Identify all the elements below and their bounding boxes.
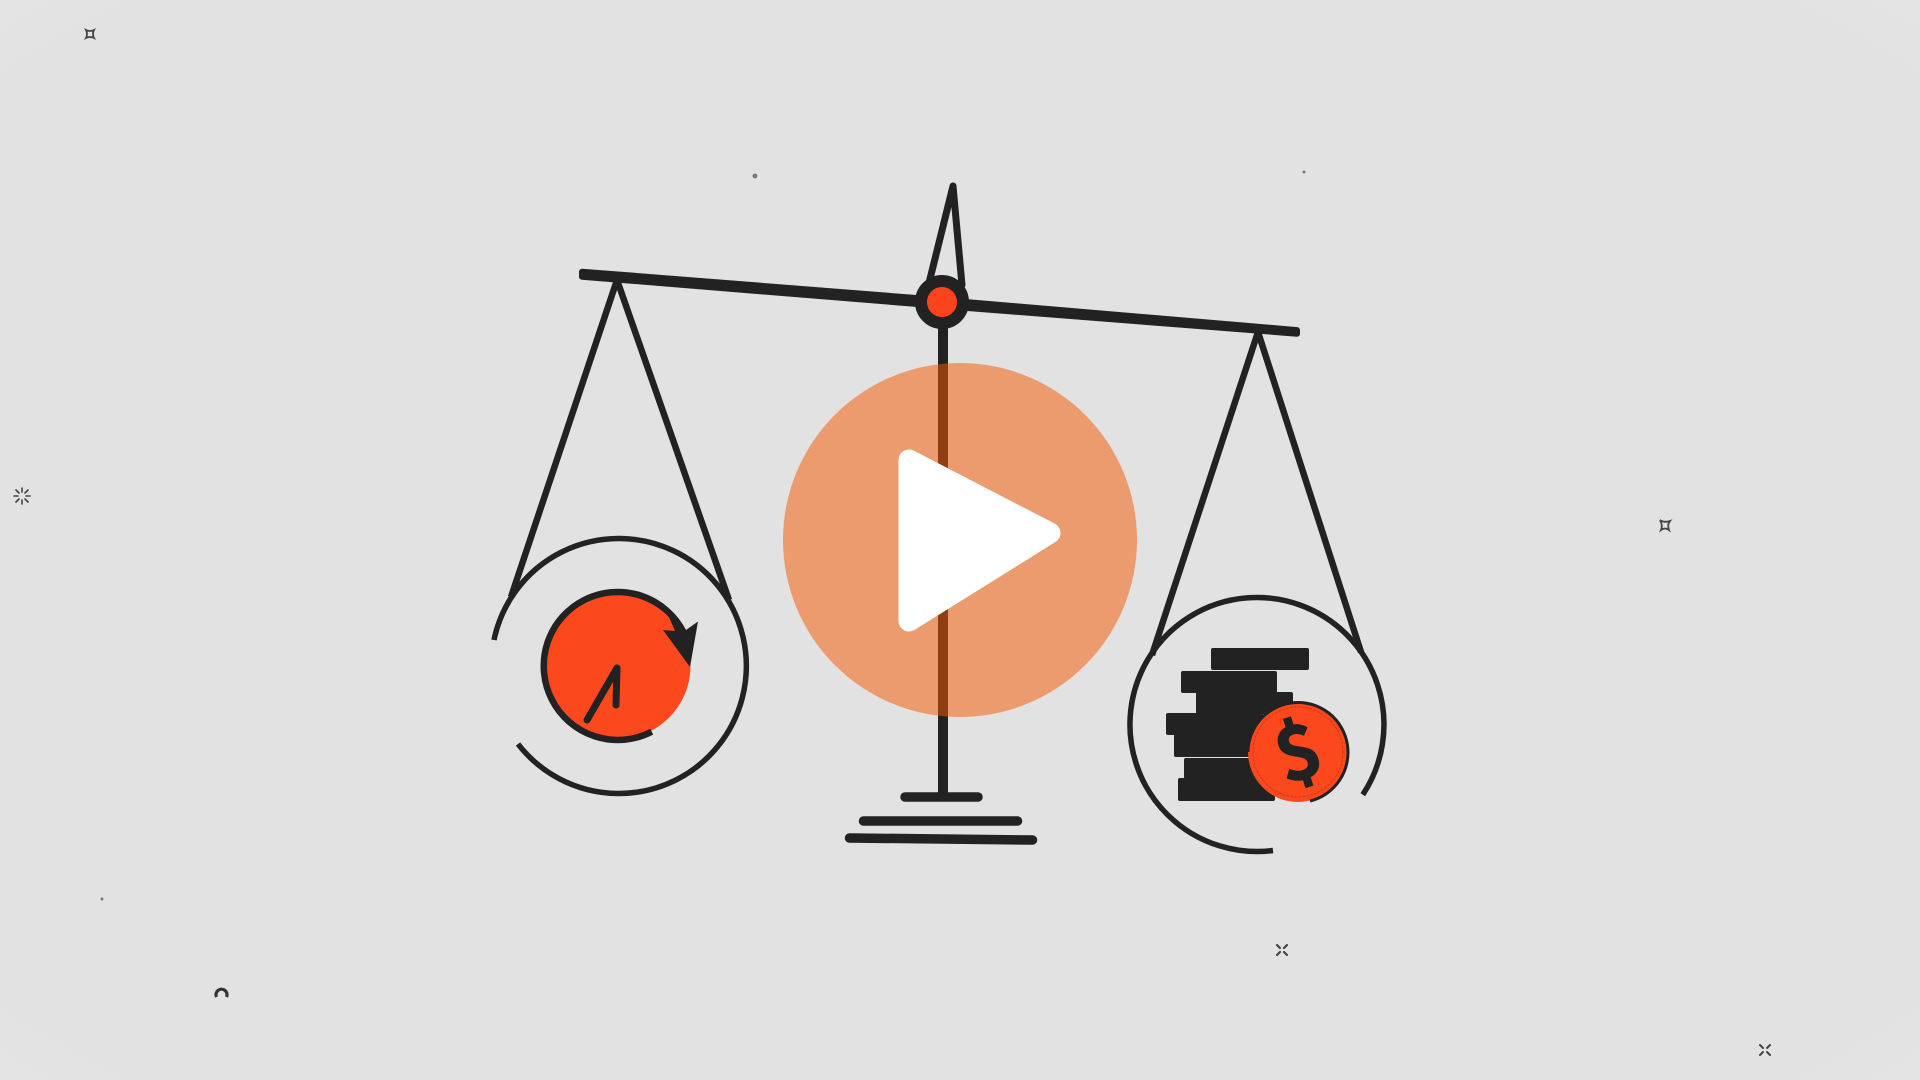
decoration: square star top left xyxy=(86,30,94,38)
play button disc xyxy=(783,363,1137,717)
clock circular arrow xyxy=(544,592,698,740)
dollar coin: $ xyxy=(1259,690,1334,805)
clock face xyxy=(544,593,690,739)
decoration: dot top centre xyxy=(753,174,757,178)
scale base xyxy=(850,797,1032,840)
decoration: four-point star right xyxy=(1660,520,1670,530)
left pan: time xyxy=(494,280,746,793)
play button xyxy=(783,363,1137,717)
right pan strings xyxy=(1152,332,1361,655)
coin stack xyxy=(1166,648,1309,801)
decoration: cross of dots bottom centre xyxy=(1277,945,1287,955)
left pan ring xyxy=(494,538,746,793)
scale beam xyxy=(582,272,1297,334)
play button triangle xyxy=(909,460,1050,621)
clock hands xyxy=(587,668,617,720)
scale pivot xyxy=(921,281,963,323)
decoration: cross of dots bottom right xyxy=(1760,1045,1770,1055)
left pan strings xyxy=(511,280,729,600)
right pan ring xyxy=(1130,598,1384,852)
scale spire xyxy=(929,186,962,285)
decoration: open ring bottom left xyxy=(216,989,227,997)
scale post xyxy=(938,310,948,797)
balance scale xyxy=(494,186,1384,852)
decoration: dot top right xyxy=(1302,170,1306,174)
right pan: money xyxy=(1130,332,1384,852)
decoration: dot bottom left xyxy=(100,898,104,900)
decoration: sunburst left xyxy=(14,488,30,504)
